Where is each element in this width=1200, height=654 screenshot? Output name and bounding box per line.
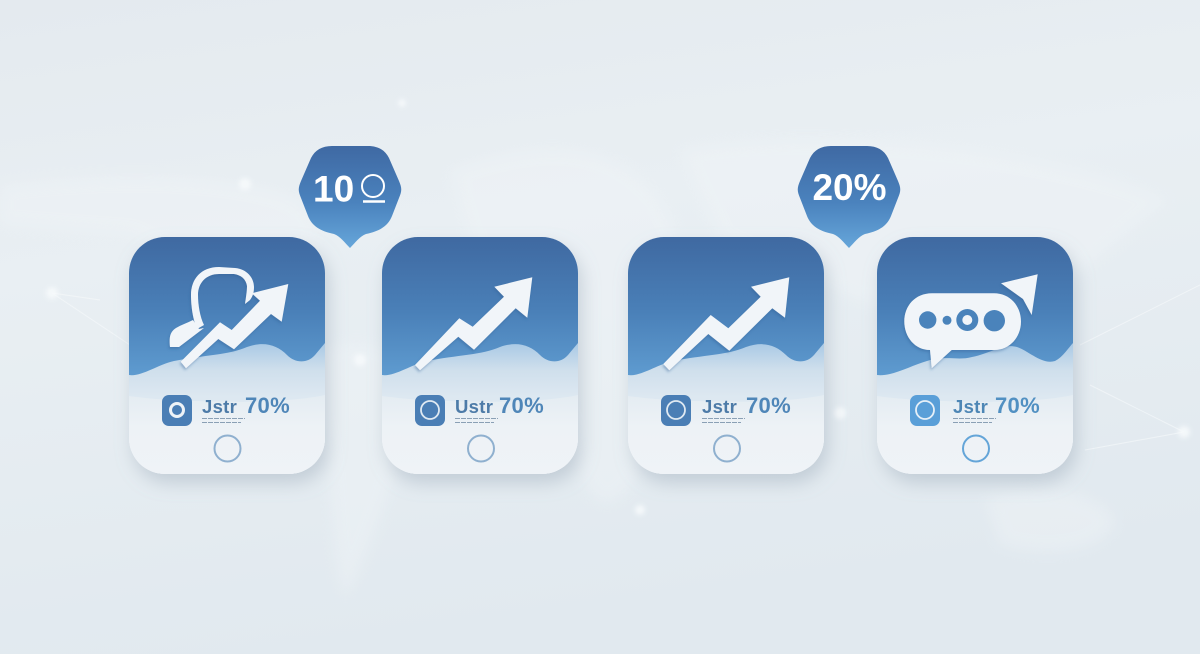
icon tile — [910, 395, 940, 426]
badge: 20% — [798, 146, 900, 248]
badge label: 10: 10 — [313, 168, 354, 210]
label: Jstr 70%: Jstr — [202, 396, 237, 417]
icon tile — [661, 395, 691, 426]
label: Jstr 70%: 70% — [746, 393, 791, 418]
home circle — [214, 436, 240, 462]
caption lines — [455, 418, 498, 422]
badge: 100 — [299, 146, 401, 248]
icon: head outline with arrow — [170, 267, 288, 368]
badge icon: circle with underline — [362, 175, 385, 202]
caption lines — [202, 418, 245, 422]
icon tile — [415, 395, 445, 426]
icon: rising arrow — [415, 277, 532, 370]
icon: rising arrow — [663, 277, 789, 370]
home circle — [468, 436, 494, 462]
icon: speech bubble with arrowhead — [904, 274, 1038, 368]
icon tile — [162, 395, 192, 426]
home circle — [963, 436, 989, 462]
label: Ustr 70%: 70% — [499, 393, 544, 418]
world map silhouette — [0, 140, 1170, 600]
panel: card 4 — [877, 237, 1073, 474]
label: Jstr 70%: 70% — [995, 393, 1040, 418]
bubble dots — [919, 309, 1005, 331]
network nodes — [46, 99, 1190, 515]
label: Jstr 70%: Jstr — [702, 396, 737, 417]
badge label: 20%: 20% — [812, 167, 887, 208]
label: Ustr 70%: Ustr — [455, 396, 493, 417]
label: Jstr 70%: Jstr — [953, 396, 988, 417]
panel: card 3 — [628, 237, 824, 474]
caption lines — [702, 418, 745, 422]
panel: card 1 — [129, 237, 325, 474]
home circle — [714, 436, 740, 462]
network lines — [52, 285, 1200, 450]
caption lines — [953, 418, 996, 422]
panel: card 2 — [382, 237, 578, 474]
label: Jstr 70%: 70% — [245, 393, 290, 418]
